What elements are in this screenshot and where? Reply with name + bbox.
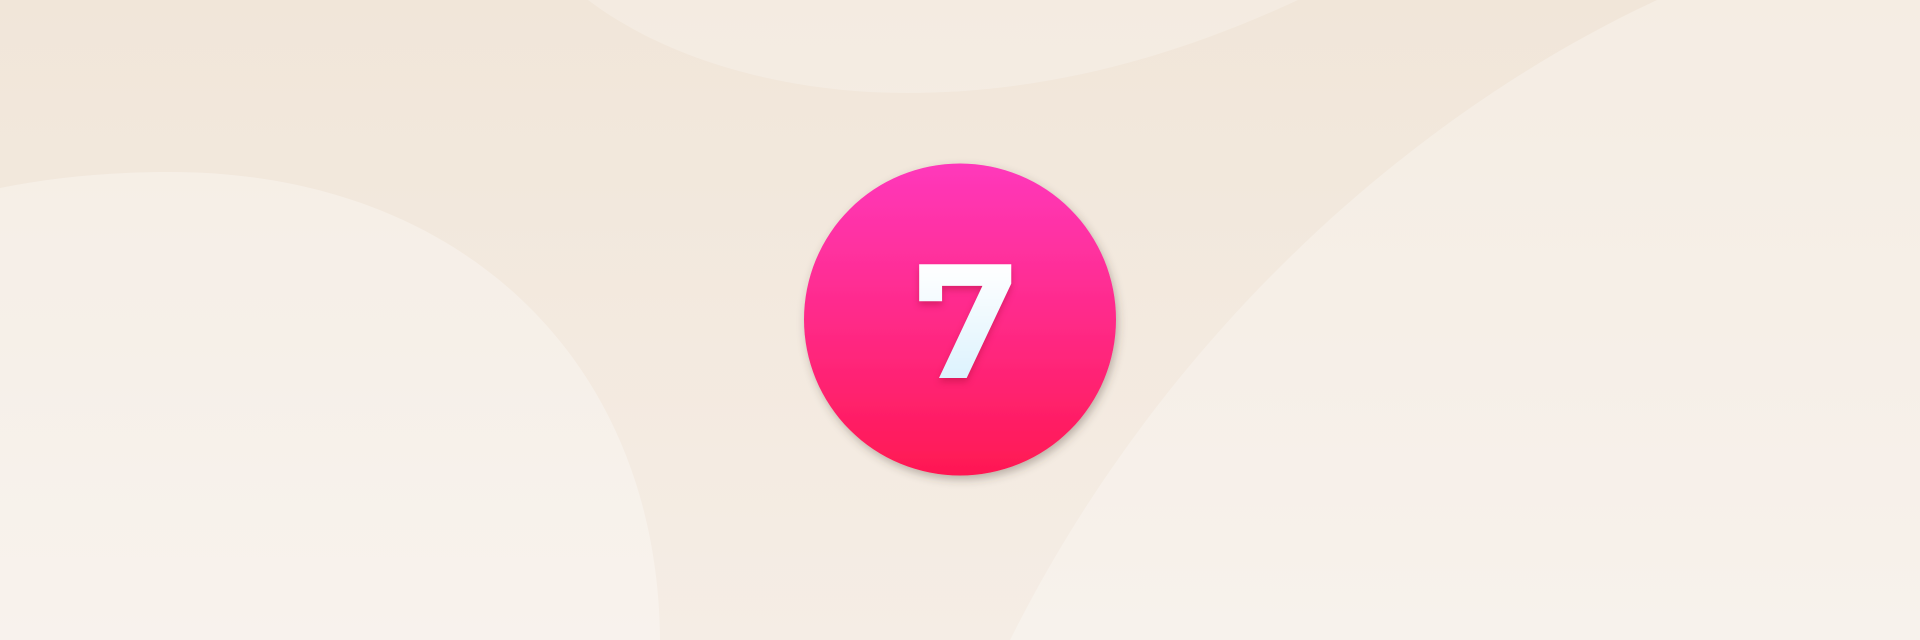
number 7: 7 (914, 231, 1017, 415)
background shape: right sweep (1010, 0, 1920, 640)
background shape: left blob (0, 172, 660, 640)
number badge (804, 164, 1116, 476)
background shape: top arc (588, 0, 1298, 93)
badge disc (804, 164, 1116, 476)
